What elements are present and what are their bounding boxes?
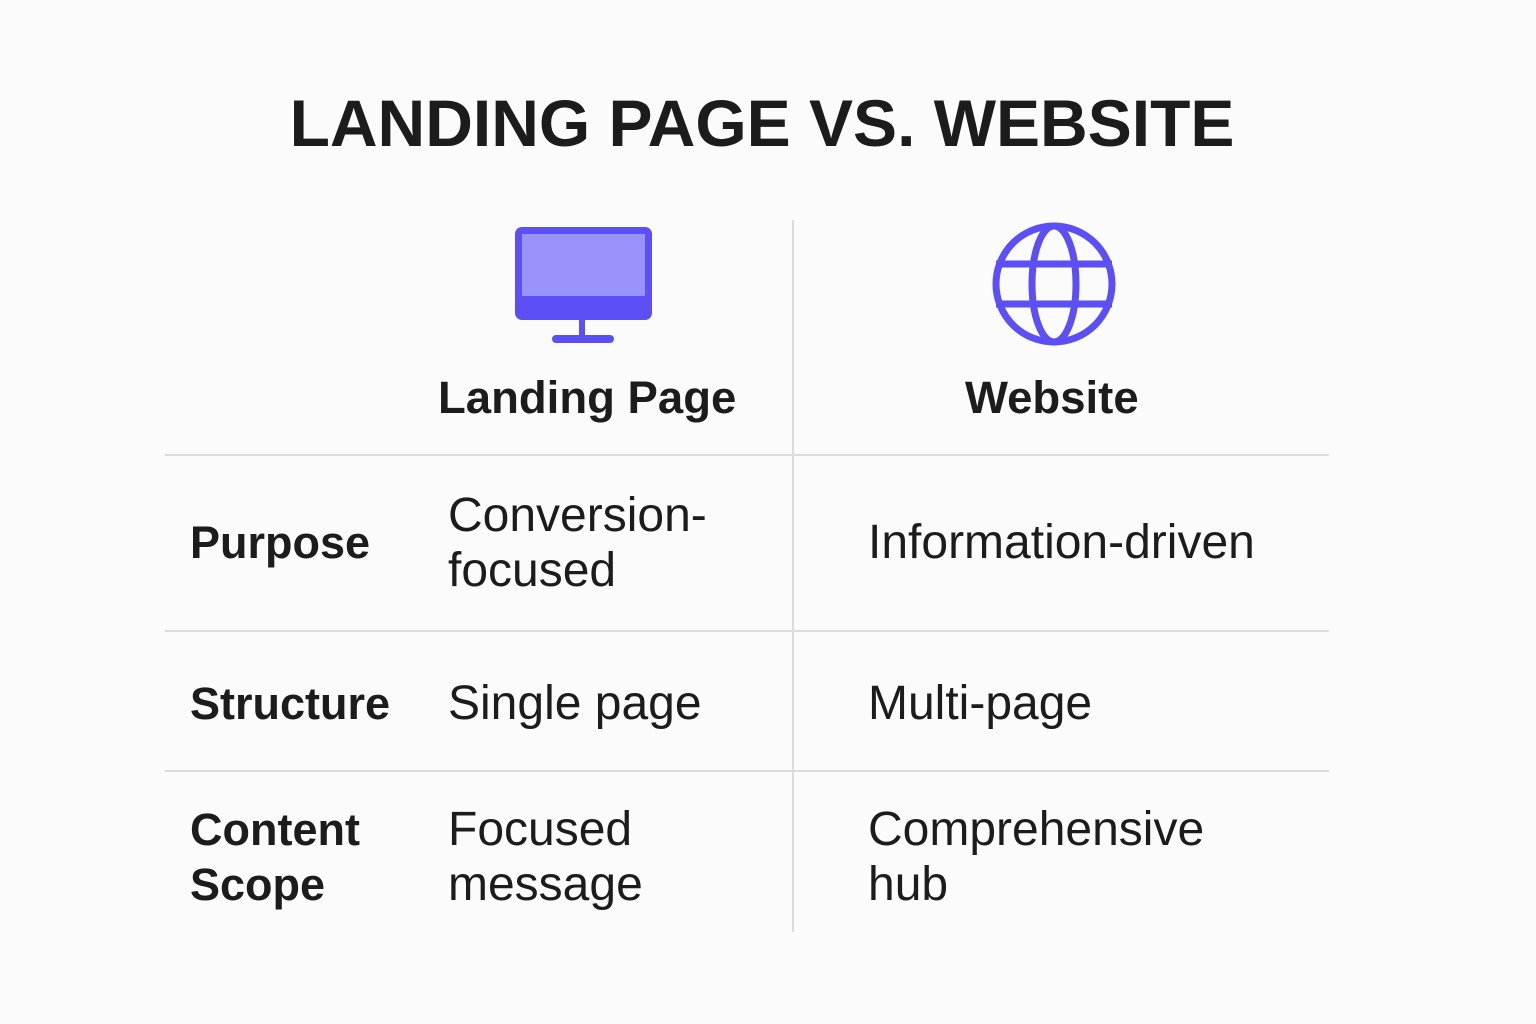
text: Single page <box>448 677 702 730</box>
row: content scope: Content <box>190 804 360 855</box>
row: structure: Structure <box>190 678 390 729</box>
text: Information-driven <box>868 516 1255 569</box>
icon: monitor <box>515 227 652 343</box>
text: Comprehensive <box>868 803 1204 856</box>
row: content scope: Scope <box>190 859 325 910</box>
text: hub <box>868 858 948 911</box>
text: message <box>448 858 643 911</box>
icon: globe <box>992 222 1116 346</box>
row: purpose: Purpose <box>190 517 370 568</box>
header: website: Website <box>965 372 1139 423</box>
header: landing page: Landing Page <box>438 372 736 423</box>
text: Focused <box>448 803 632 856</box>
title: LANDING PAGE VS. WEBSITE <box>290 86 1234 160</box>
text: focused <box>448 544 616 597</box>
text: Multi-page <box>868 677 1092 730</box>
text: Conversion- <box>448 489 707 542</box>
row: content scope <box>190 804 360 910</box>
